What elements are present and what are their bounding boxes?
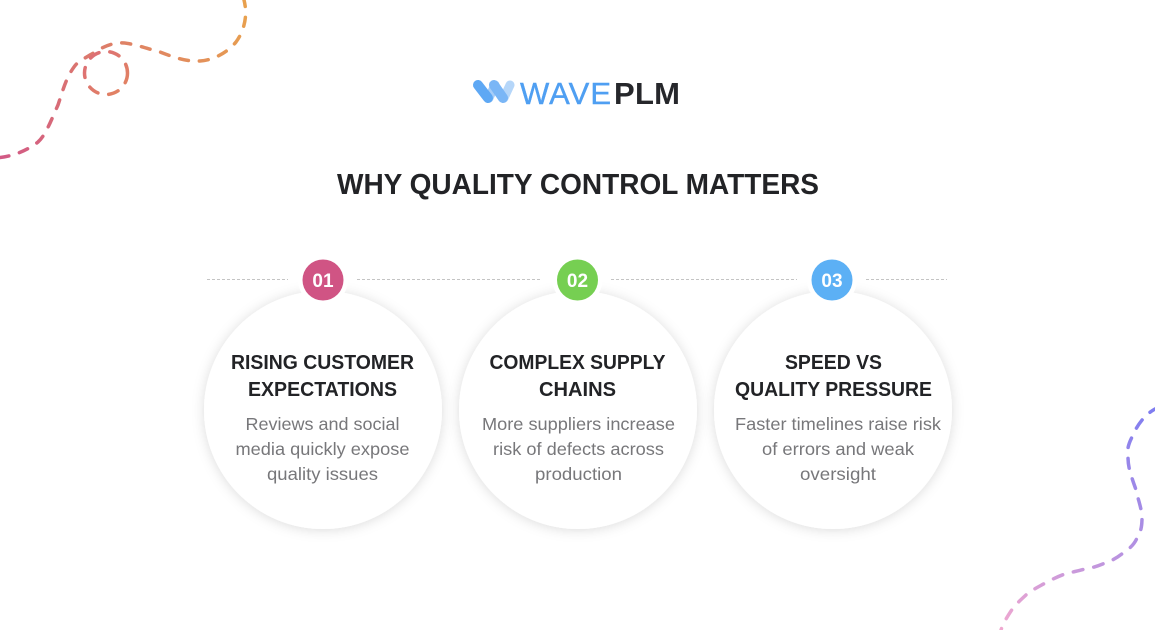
heading: SPEED VS: [785, 352, 882, 374]
decorative curve: bottom right: [1001, 409, 1155, 630]
title: WHY QUALITY CONTROL MATTERS: [337, 169, 819, 201]
card circle: [714, 291, 952, 529]
heading: COMPLEX SUPPLY: [490, 352, 666, 374]
heading: QUALITY PRESSURE: [735, 379, 932, 401]
heading: RISING CUSTOMER: [231, 352, 415, 374]
number badge 02: [552, 255, 602, 305]
logo wordmark: WAVE: [520, 76, 611, 111]
timeline dashes: [207, 278, 947, 280]
panel: complex supply chains: [459, 255, 697, 529]
description: quality issues: [267, 464, 378, 484]
heading: EXPECTATIONS: [248, 379, 397, 401]
panel: rising customer expectations: [204, 255, 442, 529]
decorative dashed circle: [84, 52, 128, 94]
logo wordmark: [520, 76, 680, 111]
logo: [478, 76, 680, 111]
panel: speed vs quality pressure: [714, 255, 952, 529]
description: risk of defects across: [493, 439, 664, 459]
logo wordmark: PLM: [614, 76, 680, 111]
description: production: [535, 464, 622, 484]
description: media quickly expose: [236, 439, 410, 459]
number badge 02: 02: [567, 271, 588, 292]
heading: CHAINS: [539, 379, 616, 401]
decorative curve: top left: [0, 0, 246, 158]
number badge 03: 03: [821, 271, 843, 292]
icon: wave logo mark: [478, 85, 510, 98]
number badge 01: [298, 255, 348, 305]
description: Faster timelines raise risk: [735, 414, 941, 434]
card circle: [459, 291, 697, 529]
number badge 03: [807, 255, 857, 305]
description: Reviews and social: [246, 414, 400, 434]
card circle: [204, 291, 442, 529]
description: oversight: [800, 464, 876, 484]
description: More suppliers increase: [482, 414, 675, 434]
number badge 01: 01: [312, 271, 334, 292]
description: of errors and weak: [762, 439, 914, 459]
